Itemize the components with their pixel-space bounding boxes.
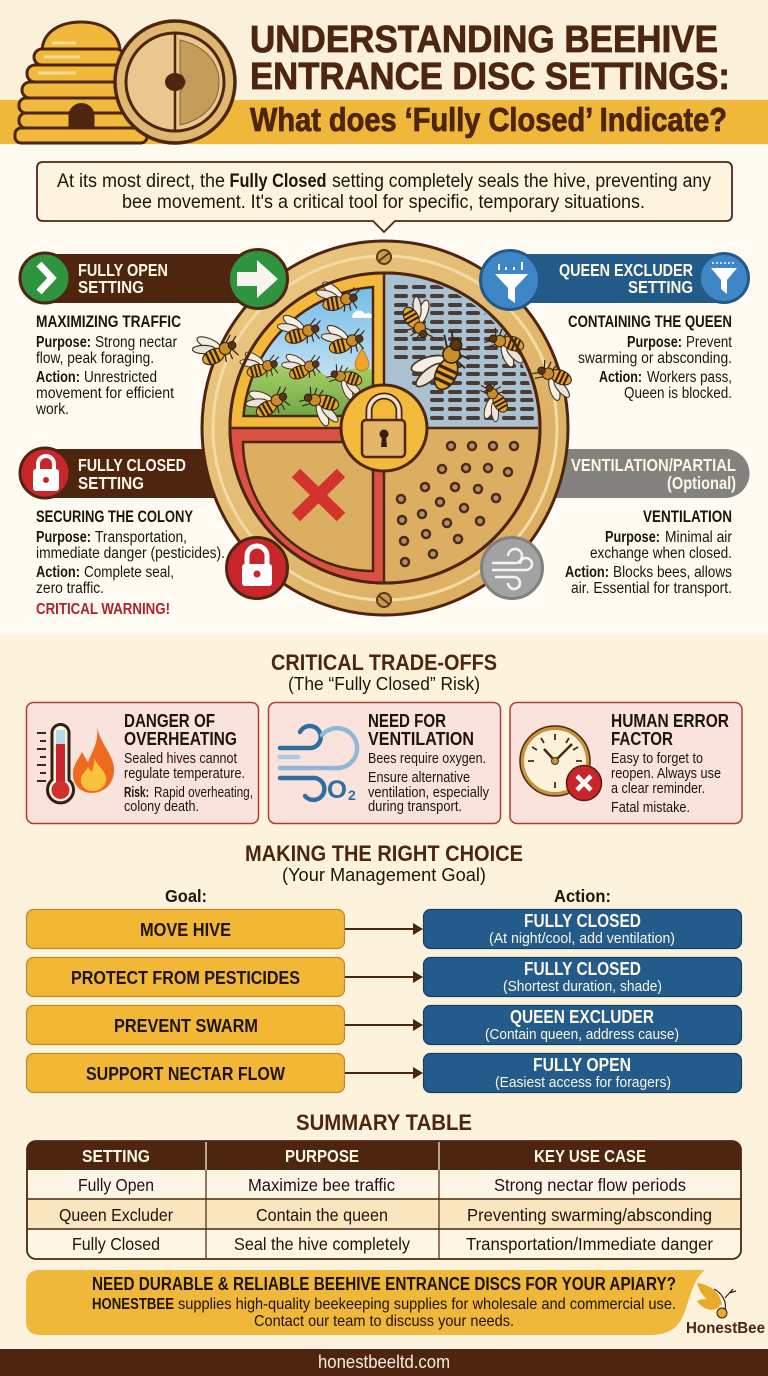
heading: critical trade-offs: (The “Fully Closed” Risk) (288, 674, 480, 694)
goal row 2 (26, 958, 344, 996)
action row 1: (At night/cool, add ventilation) (489, 930, 675, 947)
title (250, 19, 730, 138)
central disc diagram (202, 241, 568, 615)
summary table (27, 1141, 741, 1259)
panel: maximizing traffic: work. (35, 401, 69, 418)
ribbon: fully closed: FULLY CLOSED (78, 455, 186, 475)
panel: securing the colony: Purpose: (36, 529, 91, 546)
panel: securing the colony: Complete seal, (84, 564, 174, 581)
heading: making the right choice: (Your Management Goal) (282, 865, 486, 885)
ribbon: queen excluder (515, 254, 748, 303)
action row 3: QUEEN EXCLUDER (510, 1006, 654, 1027)
card: human error factor: FACTOR (611, 729, 673, 749)
table header (82, 1146, 646, 1166)
bees outside disc (186, 320, 581, 407)
icon: green arrow (228, 250, 288, 308)
panel: containing the queen: Purpose: (627, 334, 682, 351)
logo: HonestBee: HonestBee (686, 1320, 765, 1337)
action row 4: FULLY OPEN (533, 1054, 631, 1075)
card: human error factor: Easy to forget to (611, 751, 703, 767)
table row: fully closed: Fully Closed (72, 1234, 160, 1254)
icon: wind and oxygen: 2 (348, 787, 356, 803)
panel: maximizing traffic: flow, peak foraging. (36, 350, 154, 367)
card: need for ventilation: NEED FOR (368, 711, 446, 731)
background: header (0, 0, 768, 145)
action row 1 (424, 910, 742, 948)
panel: containing the queen: Workers pass, (647, 369, 732, 386)
quadrant: ventilation holes (397, 442, 518, 566)
ribbon: ventilation (540, 449, 750, 498)
panel: securing the colony: SECURING THE COLONY (36, 508, 193, 526)
panel: ventilation: Blocks bees, allows (613, 564, 732, 581)
icon: entrance disc (115, 21, 235, 143)
panel: securing the colony: zero traffic. (36, 580, 104, 597)
heading: critical trade-offs: CRITICAL TRADE-OFFS (271, 650, 497, 675)
red cross (296, 473, 341, 517)
screws (377, 250, 391, 607)
table header: PURPOSE (285, 1146, 359, 1166)
table row: fully closed (72, 1234, 713, 1254)
footer (0, 1349, 768, 1376)
action row 4: (Easiest access for foragers) (495, 1074, 671, 1091)
icon: clock (520, 726, 602, 800)
callout (37, 162, 732, 232)
table row: fully open: Maximize bee traffic (248, 1175, 395, 1195)
action row 3: (Contain queen, address cause) (485, 1026, 679, 1043)
heading: making the right choice (245, 841, 523, 885)
card: human error factor: Fatal mistake. (611, 800, 690, 816)
card: danger of overheating (26, 702, 258, 824)
table row: fully open (78, 1175, 686, 1195)
title: ENTRANCE DISC SETTINGS: (250, 56, 730, 98)
card: danger of overheating: colony death. (124, 799, 199, 815)
table row: queen excluder: Preventing swarming/absconding (467, 1205, 712, 1225)
panel: maximizing traffic: Purpose: (36, 334, 91, 351)
ribbon: fully open: FULLY OPEN (78, 260, 168, 280)
panel: ventilation: air. Essential for transport. (571, 580, 732, 597)
panel: ventilation: exchange when closed. (590, 545, 732, 562)
ribbon: fully closed (20, 448, 225, 498)
action row 1: FULLY CLOSED (524, 910, 641, 931)
panel: containing the queen: Queen is blocked. (624, 385, 732, 402)
quadrant: queen excluder (385, 273, 538, 428)
goal row 3: PREVENT SWARM (114, 1015, 258, 1036)
card: danger of overheating: Risk: (124, 785, 149, 801)
card: human error factor (510, 702, 742, 824)
card: human error factor: HUMAN ERROR (611, 711, 729, 731)
table row: queen excluder: Contain the queen (256, 1205, 388, 1225)
card: need for ventilation: Ensure alternative (368, 770, 470, 786)
column label: action: Action: (554, 886, 611, 906)
panel: maximizing traffic: Action: (36, 369, 80, 386)
heading: making the right choice: MAKING THE RIGHT CHOICE (245, 841, 523, 866)
call to action banner (26, 1270, 705, 1335)
background: upper section (0, 145, 768, 635)
action row 2: (Shortest duration, shade) (503, 978, 662, 995)
callout: Fully Closed (230, 171, 326, 192)
panel: ventilation: Minimal air (665, 529, 732, 546)
panel: maximizing traffic (35, 313, 181, 418)
panel: maximizing traffic: MAXIMIZING TRAFFIC (36, 313, 181, 331)
ribbon: ventilation: (Optional) (667, 473, 736, 493)
quadrant: fully open (231, 273, 384, 432)
title: UNDERSTANDING BEEHIVE (250, 19, 718, 61)
arrow 1 (345, 923, 423, 935)
callout: At its most direct, the (57, 171, 225, 192)
table row: queen excluder (59, 1205, 712, 1225)
action row 3 (424, 1006, 742, 1044)
card: human error factor: a clear reminder. (611, 781, 705, 797)
ribbon: ventilation: VENTILATION/PARTIAL (571, 455, 736, 475)
ribbon: queen excluder: QUEEN EXCLUDER (559, 260, 693, 280)
icon: wind and oxygen (280, 726, 357, 804)
panel: securing the colony: CRITICAL WARNING! (36, 601, 170, 618)
goal row 2: PROTECT FROM PESTICIDES (71, 967, 300, 988)
icon: grey wind (482, 538, 542, 598)
table row: fully closed: Seal the hive completely (234, 1234, 410, 1254)
background: lower section (0, 635, 768, 1349)
arrow 4 (345, 1067, 423, 1079)
panel: containing the queen (568, 313, 733, 402)
call to action banner: Contact our team to discuss your needs. (254, 1313, 514, 1330)
panel: securing the colony: immediate danger (pesticides). (36, 545, 225, 562)
ribbon: fully open (20, 253, 245, 303)
panel: containing the queen: swarming or absconding. (578, 350, 732, 367)
goal row 1 (26, 910, 344, 948)
card: need for ventilation (268, 702, 500, 824)
icon: red lock (226, 538, 288, 598)
panel: containing the queen: CONTAINING THE QUEEN (568, 313, 732, 331)
action row 4 (424, 1054, 742, 1092)
icon: wind and oxygen: O (327, 776, 347, 804)
quadrant: fully closed (231, 428, 384, 583)
action row 2: FULLY CLOSED (524, 958, 641, 979)
card: need for ventilation: Bees require oxygen. (368, 751, 486, 767)
goal row 4: SUPPORT NECTAR FLOW (86, 1063, 285, 1084)
center padlock (341, 385, 427, 471)
header band (0, 100, 768, 144)
panel: maximizing traffic: Strong nectar (95, 334, 177, 351)
goal row 3 (26, 1006, 344, 1044)
goal row 1: MOVE HIVE (140, 919, 231, 940)
ribbon: fully open: SETTING (78, 277, 144, 297)
card: danger of overheating: OVERHEATING (124, 729, 237, 749)
panel: ventilation (565, 508, 732, 597)
card: danger of overheating: regulate temperature. (124, 766, 245, 782)
action row 2 (424, 958, 742, 996)
table header: SETTING (82, 1146, 150, 1166)
card: danger of overheating: DANGER OF (124, 711, 215, 731)
panel: securing the colony: Transportation, (95, 529, 187, 546)
panel: maximizing traffic: movement for efficient (36, 385, 175, 402)
ribbon: fully closed: SETTING (78, 473, 144, 493)
goal row 4 (26, 1054, 344, 1092)
call to action banner: supplies high-quality beekeeping supplies for wholesale and commercial use. (178, 1296, 676, 1313)
card: need for ventilation: ventilation, especially (368, 785, 490, 801)
card: danger of overheating: Rapid overheating, (154, 785, 253, 801)
table row: queen excluder: Queen Excluder (59, 1205, 173, 1225)
ribbon: queen excluder: SETTING (628, 277, 693, 297)
icon: beehive (15, 22, 147, 143)
panel: ventilation: VENTILATION (643, 508, 732, 526)
icon: flame (73, 727, 114, 793)
card: danger of overheating: Sealed hives cannot (124, 751, 237, 767)
card: need for ventilation: VENTILATION (368, 729, 474, 749)
table row: fully open: Fully Open (78, 1175, 154, 1195)
panel: securing the colony (36, 508, 225, 618)
heading: critical trade-offs (271, 650, 497, 694)
callout: setting completely seals the hive, preventing any (332, 171, 711, 192)
panel: containing the queen: Action: (599, 369, 642, 386)
logo: HonestBee (686, 1283, 765, 1337)
panel: containing the queen: Prevent (686, 334, 733, 351)
card: human error factor: reopen. Always use (611, 766, 721, 782)
panel: securing the colony: Action: (36, 564, 80, 581)
callout: bee movement. It's a critical tool for specific, temporary situations. (122, 192, 645, 213)
icon: blue funnel (480, 250, 540, 310)
heading: summary table: SUMMARY TABLE (296, 1110, 472, 1135)
card: need for ventilation: during transport. (368, 799, 462, 815)
table row: fully open: Strong nectar flow periods (494, 1175, 686, 1195)
table row: fully closed: Transportation/Immediate danger (466, 1234, 713, 1254)
footer: honestbeeltd.com (318, 1352, 450, 1372)
disc rim (202, 241, 568, 615)
column label: goal: Goal: (165, 886, 207, 906)
icon: thermometer (37, 725, 74, 803)
arrow 2 (345, 971, 423, 983)
arrow 3 (345, 1019, 423, 1031)
panel: ventilation: Purpose: (605, 529, 660, 546)
panel: maximizing traffic: Unrestricted (84, 369, 157, 386)
table header: KEY USE CASE (534, 1146, 646, 1166)
call to action banner: HONESTBEE (92, 1296, 174, 1313)
panel: ventilation: Action: (565, 564, 609, 581)
